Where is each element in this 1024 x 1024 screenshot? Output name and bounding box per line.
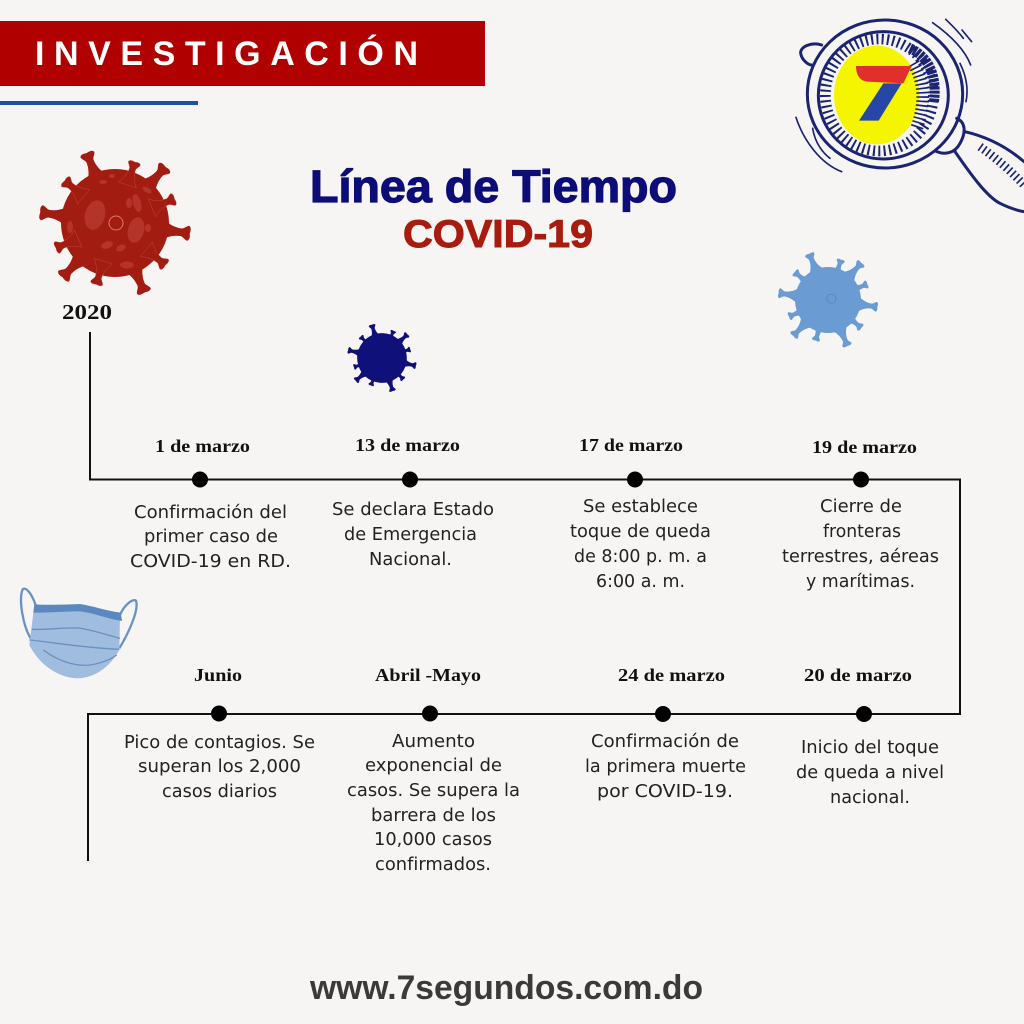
title: Línea de Tiempo: Línea de Tiempo <box>310 161 677 212</box>
event: 17 de marzo: 17 de marzo <box>579 435 683 455</box>
event: 17 de marzo <box>570 435 711 592</box>
event: Junio: Junio <box>194 665 242 685</box>
event: 24 de marzo <box>585 665 746 802</box>
event: 1 de marzo: 1 de marzo <box>155 436 250 456</box>
event: 13 de marzo: de Emergencia <box>344 525 477 545</box>
header banner: INVESTIGACIÓN: INVESTIGACIÓN <box>35 35 418 73</box>
label: 2020: 2020 <box>62 300 112 324</box>
footer website: www.7segundos.com.do <box>309 969 703 1007</box>
event: 1 de marzo: COVID-19 en RD. <box>130 552 291 572</box>
event: Abril - Mayo: exponencial de <box>365 756 502 776</box>
event: Abril - Mayo: confirmados. <box>375 855 491 875</box>
event: 19 de marzo: 19 de marzo <box>812 437 917 457</box>
event: 19 de marzo <box>782 437 939 592</box>
icon: red virus <box>38 148 192 297</box>
event: Abril - Mayo: Abril -Mayo <box>375 665 481 685</box>
event: 20 de marzo: 20 de marzo <box>804 665 912 685</box>
event: 17 de marzo: 6:00 a. m. <box>596 572 685 592</box>
event: Abril - Mayo: barrera de los <box>371 806 496 826</box>
event: 17 de marzo: de 8:00 p. m. a <box>574 547 707 567</box>
event: 24 de marzo: 24 de marzo <box>618 665 725 685</box>
event: 24 de marzo: por COVID-19. <box>597 782 733 802</box>
event: 20 de marzo: Inicio del toque <box>801 738 939 758</box>
event: 17 de marzo: Se establece <box>583 497 698 517</box>
event: Abril - Mayo: 10,000 casos <box>374 830 492 850</box>
icon: navy virus <box>344 321 420 395</box>
event: 13 de marzo <box>332 435 494 570</box>
icon: magnifying glass with 7 logo <box>796 19 1024 212</box>
event: 13 de marzo: Se declara Estado <box>332 500 494 520</box>
event: 24 de marzo: Confirmación de <box>591 732 739 752</box>
subtitle: COVID-19: COVID-19 <box>403 213 593 256</box>
event: Abril - Mayo <box>347 665 520 875</box>
event: 19 de marzo: y marítimas. <box>806 572 915 592</box>
event: 24 de marzo: la primera muerte <box>585 757 746 777</box>
event: 19 de marzo: fronteras <box>823 522 901 542</box>
event: Junio: casos diarios <box>162 782 277 802</box>
event: 20 de marzo: de queda a nivel <box>796 763 944 783</box>
event: 17 de marzo: toque de queda <box>570 522 711 542</box>
event: 13 de marzo: Nacional. <box>369 550 452 570</box>
event: Junio <box>124 665 315 802</box>
icon: light blue virus <box>777 251 879 349</box>
event: 19 de marzo: Cierre de <box>820 497 902 517</box>
event: 20 de marzo <box>796 665 944 808</box>
event: Abril - Mayo: casos. Se supera la <box>347 781 520 801</box>
header banner: INVESTIGACIÓN <box>0 21 485 86</box>
event: 1 de marzo: Confirmación del <box>134 503 287 523</box>
timeline connector line <box>88 332 960 861</box>
event: Junio: Pico de contagios. Se <box>124 733 315 753</box>
header blue rule <box>0 101 198 105</box>
event: Junio: superan los 2,000 <box>138 757 301 777</box>
event: 13 de marzo: 13 de marzo <box>355 435 460 455</box>
event: 20 de marzo: nacional. <box>830 788 910 808</box>
event: Abril - Mayo: Aumento <box>392 732 475 752</box>
icon: face mask <box>21 589 137 678</box>
event: 1 de marzo <box>130 436 291 572</box>
event: 1 de marzo: primer caso de <box>144 527 278 547</box>
event: 19 de marzo: terrestres, aéreas <box>782 547 939 567</box>
